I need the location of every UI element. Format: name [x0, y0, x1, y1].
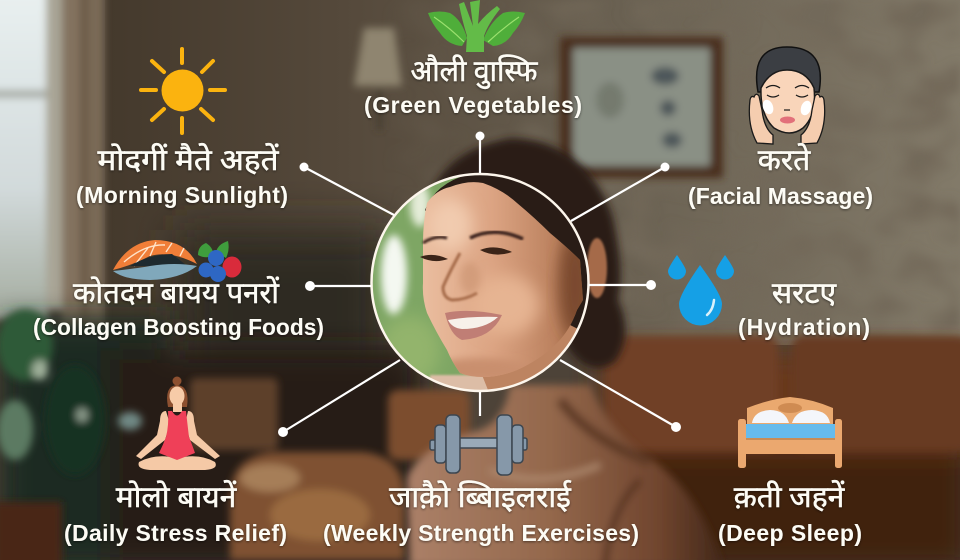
label: green vegetables: औली वुास्फि: [410, 54, 538, 94]
label: weekly strength exercises: जाक़ैो ब्बािइलराई: [389, 479, 572, 520]
connector: daily stress relief: [278, 360, 400, 437]
connector: green vegetables: [476, 132, 484, 173]
label: facial massage: (Facial Massage): [688, 183, 873, 209]
icon: facial massage: [749, 47, 825, 144]
neck: [482, 325, 577, 390]
icon: sun: [141, 49, 225, 133]
sofa pieces: [190, 336, 960, 560]
label: collagen boosting foods: (Collagen Boosting Foods): [33, 314, 324, 340]
label: daily stress relief: (Daily Stress Relief): [64, 520, 287, 546]
label: facial massage: [688, 142, 873, 209]
connector: facial massage: [571, 162, 670, 221]
face: [422, 182, 583, 377]
label: daily stress relief: मोलो बायनें: [116, 480, 238, 520]
lamp: [354, 28, 402, 130]
plant: [0, 309, 142, 560]
eyes: [420, 255, 448, 261]
portrait circle: [370, 170, 600, 400]
label: weekly strength exercises: [323, 479, 639, 546]
window and curtain: [0, 0, 104, 330]
icon: salmon and berries: [113, 240, 242, 282]
label: weekly strength exercises: (Weekly Strength Exercises): [323, 520, 639, 546]
icon: dumbbell: [430, 415, 527, 475]
connector: morning sunlight: [300, 162, 394, 215]
label: hydration: (Hydration): [738, 314, 870, 340]
label: morning sunlight: [76, 142, 288, 208]
picture frame: [560, 37, 723, 178]
eyebrows: [423, 237, 447, 243]
woman: hair and body behind portrait: [407, 138, 722, 560]
icon: bed: [738, 397, 842, 468]
label: morning sunlight: (Morning Sunlight): [76, 182, 288, 208]
connector: deep sleep: [560, 360, 681, 432]
portrait background: [372, 177, 472, 378]
nose: [443, 253, 477, 300]
icon: green vegetables: [428, 0, 525, 52]
label: hydration: सरटए: [772, 277, 838, 316]
label: deep sleep: [718, 480, 862, 546]
label: green vegetables: [364, 54, 582, 118]
label: collagen boosting foods: कोतदम बायय पनरों: [73, 276, 280, 316]
label: green vegetables: (Green Vegetables): [364, 92, 582, 118]
connector: collagen foods: [305, 281, 371, 291]
icon: meditation figure: [136, 376, 220, 470]
label: facial massage: करते: [758, 142, 811, 183]
icon: water drops: [668, 255, 734, 325]
label: hydration: [738, 277, 870, 340]
mouth: [445, 311, 502, 340]
connector: strength exercises: [479, 392, 481, 416]
label: collagen boosting foods: [33, 276, 324, 340]
label: daily stress relief: [64, 480, 287, 546]
label: morning sunlight: मोदगीं मैते अहतें: [98, 142, 279, 183]
label: deep sleep: क़ती जहनें: [734, 480, 846, 520]
connector: hydration: [589, 280, 656, 290]
label: deep sleep: (Deep Sleep): [718, 520, 862, 546]
